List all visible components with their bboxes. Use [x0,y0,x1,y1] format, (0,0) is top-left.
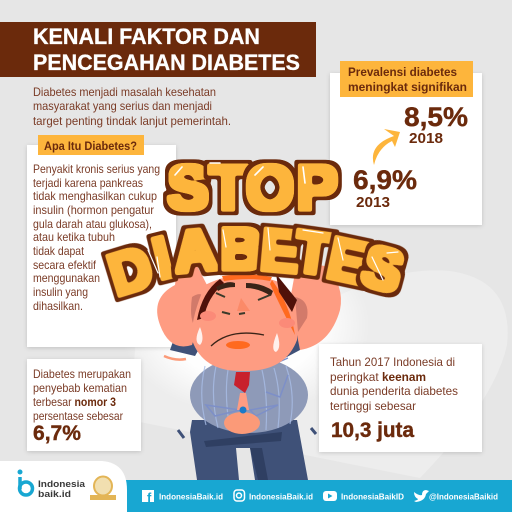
heading: DIABETES: T [291,219,335,288]
hair [197,279,224,320]
head [192,275,297,371]
heading: DIABETES: D [101,234,160,309]
panel: peringkat keenam: tertinggi sebesar [330,399,416,413]
panel: apa itu diabetes: insulin (hormon pengatur [33,203,154,217]
sweat [196,327,279,352]
logo: indonesia baik: baik.id [38,489,71,500]
panel: apa itu diabetes: Apa Itu Diabetes? [44,141,137,153]
icon: facebook: f [147,490,152,505]
panel: penyebab kematian: penyebab kematian [33,381,127,395]
panel: prevalensi: 8,5% [404,102,468,132]
intro text: Diabetes menjadi masalah kesehatan [33,85,216,99]
icon: rising arrow [373,129,400,165]
title banner: PENCEGAHAN DIABETES [33,50,300,75]
panel: penyebab kematian: Diabetes merupakan [33,367,131,381]
panel: apa itu diabetes: terjadi karena pankreas [33,176,143,190]
panel: apa itu diabetes: secara efektif [33,258,97,272]
heading: DIABETES: A [171,217,219,286]
ears [191,294,308,332]
panel: penyebab kematian: persentase sebesar [33,409,123,423]
icon: youtube [323,491,337,501]
title banner [0,22,316,77]
footer bar: IndonesiaBaik.id [249,492,313,502]
tie [234,372,250,393]
panel: penyebab kematian [27,359,141,451]
panel: prevalensi [330,61,482,225]
panel: apa itu diabetes: dihasilkan. [33,299,83,313]
panel: peringkat keenam: peringkat keenam [330,370,426,384]
logo: indonesia baik: Indonesia [38,479,86,490]
footer bar: IndonesiaBaikID [341,492,404,502]
heading: DIABETES: I [147,225,178,292]
mouth [211,333,264,346]
panel: apa itu diabetes: menggunakan [33,271,100,285]
intro text [33,85,231,128]
panel: prevalensi: 2013 [356,194,390,211]
panel: apa itu diabetes: Penyakit kronis serius yang [33,162,160,176]
brows [216,282,273,296]
arms [157,262,207,346]
panel: apa itu diabetes: tidak menghasilkan cukup [33,189,157,203]
panel: peringkat keenam: dunia penderita diabetes [330,384,458,398]
heading: DIABETES [101,217,410,309]
heading: DIABETES: S [356,233,410,306]
panel: penyebab kematian: terbesar nomor 3 [33,395,116,409]
footer bar: IndonesiaBaik.id [159,492,223,502]
panel: apa itu diabetes: atau ketika tubuh [33,230,115,244]
award badge [90,476,116,500]
foot marks [178,428,316,438]
intro text: masyarakat yang serius dan menjadi [33,99,212,113]
heading: STOP [167,154,338,223]
panel: apa itu diabetes: tidak dapat [33,244,85,258]
heading: DIABETES: B [220,217,262,282]
icon: instagram [234,490,244,501]
panel: apa itu diabetes: insulin yang [33,285,88,299]
panel: prevalensi: Prevalensi diabetes [348,67,457,79]
logo: indonesia baik [18,470,86,500]
panel: peringkat keenam [319,344,482,452]
button [240,406,246,414]
panel: apa itu diabetes: gula darah atau glukosa), [33,217,152,231]
eyes and nose [216,293,270,314]
cheeks [200,311,216,321]
panel: peringkat keenam: Tahun 2017 Indonesia di [330,355,455,369]
panel: peringkat keenam: 10,3 juta [331,419,414,442]
character illustration [157,262,341,480]
panel: prevalensi: 2018 [409,130,443,147]
belly [237,393,249,410]
panel: prevalensi: meningkat signifikan [348,82,467,94]
heading: DIABETES: E [322,226,373,297]
torso shirt [190,357,308,433]
panel: prevalensi: 6,9% [353,165,417,195]
intro text: target penting tindak lanjut pemerintah. [33,114,231,128]
pants [190,420,308,480]
panel: penyebab kematian: 6,7% [33,422,81,445]
heading: STOP: P [296,154,338,223]
icon: facebook [142,490,154,505]
jacket sleeves [170,313,306,358]
heading: STOP: S [167,154,209,223]
icon: twitter [414,490,429,502]
heading: STOP: O [246,154,294,223]
footer bar [0,461,512,512]
panel: apa itu diabetes [27,135,176,347]
footer bar: @IndonesiaBaikid [429,492,498,502]
title banner: KENALI FAKTOR DAN [33,24,260,49]
heading: STOP: T [209,154,247,223]
heading: DIABETES: E [258,217,302,286]
